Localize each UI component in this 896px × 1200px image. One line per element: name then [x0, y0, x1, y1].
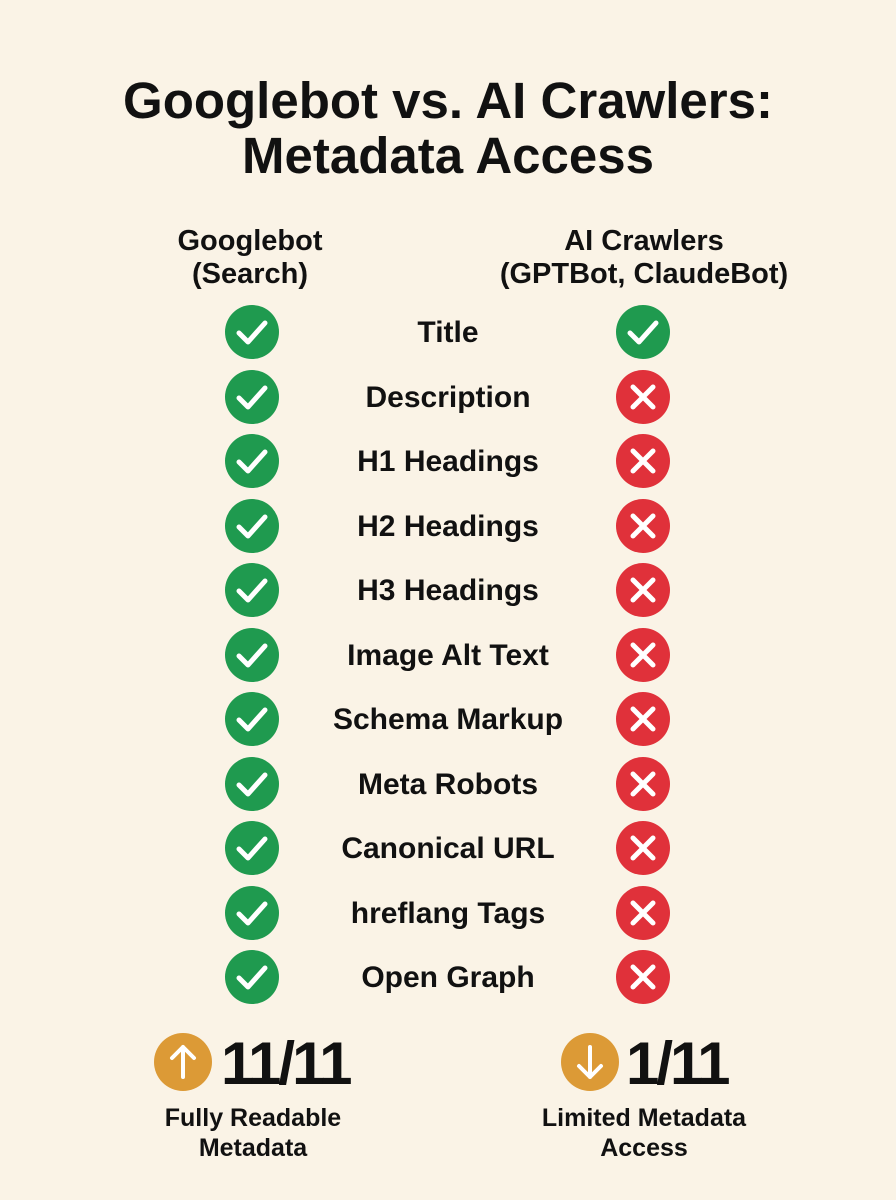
stat: AI Crawlers 1/11: 1/11 [626, 1030, 729, 1097]
icon: down arrow [561, 1033, 619, 1091]
stat: AI Crawlers 1/11 [542, 1030, 747, 1162]
row: Description: Description [365, 381, 531, 414]
row: Meta Robots: Meta Robots [358, 768, 538, 801]
row: Schema Markup [225, 692, 670, 746]
stat: Googlebot 11/11: Fully Readable [165, 1104, 341, 1132]
icon: up arrow [154, 1033, 212, 1091]
stat: Googlebot 11/11 [154, 1030, 351, 1162]
stat: Googlebot 11/11: Metadata [199, 1134, 308, 1162]
row: hreflang Tags: hreflang Tags [351, 897, 545, 930]
row: Image Alt Text: Image Alt Text [347, 639, 549, 672]
stat: Googlebot 11/11: 11/11 [221, 1030, 351, 1097]
stat: AI Crawlers 1/11: Access [600, 1134, 688, 1162]
row: Open Graph [225, 950, 670, 1004]
row: Schema Markup: Schema Markup [333, 703, 563, 736]
comparison rows [225, 305, 670, 1004]
column header: AI Crawlers [500, 225, 788, 290]
column header: AI Crawlers: (GPTBot, ClaudeBot) [500, 258, 788, 290]
title: Metadata Access [242, 127, 654, 184]
row: H3 Headings: H3 Headings [357, 574, 539, 607]
title [123, 72, 773, 184]
row: Open Graph: Open Graph [361, 961, 535, 994]
row: Image Alt Text [225, 628, 670, 682]
row: H1 Headings: H1 Headings [357, 445, 539, 478]
stat: AI Crawlers 1/11: Limited Metadata [542, 1104, 747, 1132]
column header: Googlebot: (Search) [192, 258, 308, 290]
row: H2 Headings [225, 499, 670, 553]
row: H3 Headings [225, 563, 670, 617]
title: Googlebot vs. AI Crawlers: [123, 72, 773, 129]
row: Title: Title [417, 316, 479, 349]
row: hreflang Tags [225, 886, 670, 940]
column header: Googlebot [178, 225, 323, 290]
column header: AI Crawlers: AI Crawlers [564, 225, 724, 257]
row: H1 Headings [225, 434, 670, 488]
row: Description [225, 370, 670, 424]
row: Canonical URL: Canonical URL [341, 832, 555, 865]
column header: Googlebot: Googlebot [178, 225, 323, 257]
row: Meta Robots [225, 757, 670, 811]
row: Canonical URL [225, 821, 670, 875]
row: Title [225, 305, 670, 359]
row: H2 Headings: H2 Headings [357, 510, 539, 543]
